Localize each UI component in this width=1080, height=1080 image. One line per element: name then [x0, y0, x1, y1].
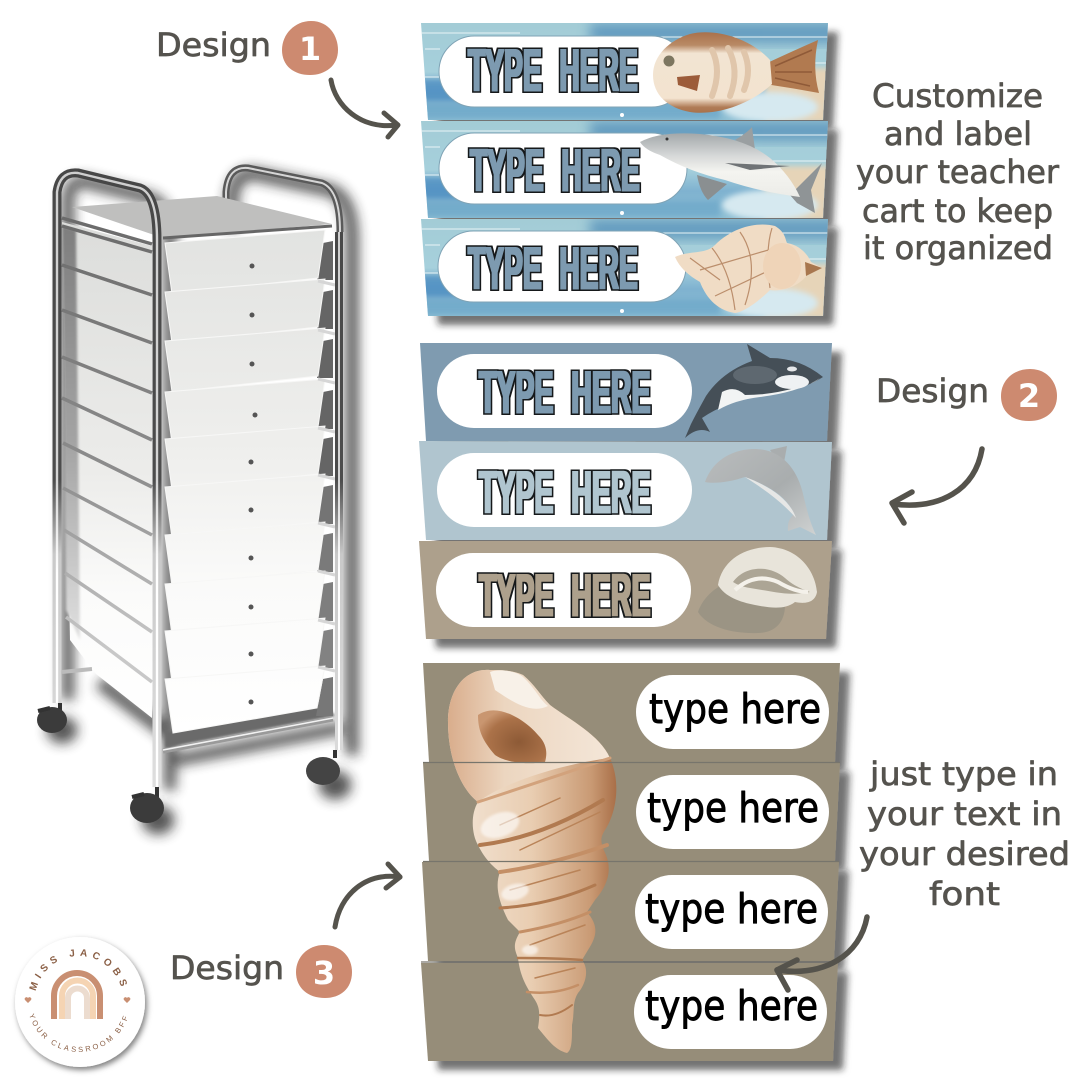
label: conch	[410, 219, 850, 319]
text block: type note: just type in	[869, 755, 1058, 793]
panel: design 3 shell labels	[421, 663, 840, 1061]
cart shadow	[47, 174, 352, 834]
icon: whelk shell	[698, 547, 817, 633]
rainbow	[54, 973, 100, 1019]
label strip 4	[421, 963, 838, 1061]
heading: Design 2: Design	[876, 372, 989, 410]
panel: design 2 solid labels	[419, 343, 832, 639]
logo badge	[13, 936, 151, 1074]
side panel	[62, 222, 152, 718]
text block: customize note: your teacher	[856, 153, 1060, 191]
arrow: Design 3 to labels	[335, 864, 400, 927]
pill: type here 3	[635, 875, 828, 949]
pill: type here 4	[634, 975, 827, 1049]
pill: type here 2	[636, 775, 829, 849]
label: shark: TYPE HERE	[470, 137, 640, 204]
heading: Design 3: Design	[170, 949, 284, 987]
right rail lips	[318, 281, 335, 671]
logo hearts	[25, 997, 130, 1003]
text block: customize note: Customize	[872, 77, 1043, 115]
icon: conch	[675, 224, 822, 313]
seams between strips	[421, 762, 840, 962]
pill: type here 2: type here	[647, 784, 819, 832]
gap under drawers	[165, 703, 335, 748]
heading: Design 2	[876, 369, 1057, 421]
casters	[37, 703, 340, 823]
badge: 2: 2	[1018, 377, 1040, 415]
badge: 1	[282, 21, 338, 75]
label: shark	[410, 121, 850, 221]
posts and front handle	[57, 173, 339, 787]
badge: 1: 1	[299, 30, 321, 68]
text block: type note: your desired	[859, 835, 1070, 873]
icon: fish	[653, 32, 819, 113]
arrow: note to pill	[777, 917, 867, 990]
icon: shark	[640, 127, 822, 213]
badge: 3	[296, 945, 352, 998]
label: orca	[420, 343, 832, 441]
icon: dolphin	[705, 446, 816, 535]
text block: customize note	[856, 77, 1060, 267]
drawer knobs	[248, 264, 258, 704]
pill: type here 4: type here	[645, 982, 818, 1030]
right gaps	[316, 241, 333, 716]
arrow: Design 1 to labels	[331, 80, 398, 137]
label strip 2	[423, 763, 840, 861]
label strip 3	[422, 862, 839, 961]
label: orca: TYPE HERE	[479, 358, 650, 426]
label: dolphin	[419, 441, 832, 540]
label: conch: TYPE HERE	[468, 235, 638, 302]
side rails	[62, 218, 152, 682]
label: fish: TYPE HERE	[468, 37, 638, 104]
logo tagline: YOUR CLASSROOM BFF	[30, 1013, 127, 1052]
pill: type here 1: type here	[649, 685, 821, 733]
drawers	[165, 230, 325, 733]
icon: large spiral shell	[448, 670, 616, 1053]
side strip	[62, 226, 80, 640]
text block: type note: your text in	[867, 795, 1062, 833]
text block: type note	[859, 755, 1070, 913]
logo name: MISS JACOBS	[29, 949, 127, 991]
icon: orca	[685, 344, 823, 438]
top tray	[72, 196, 332, 238]
badge: 3: 3	[313, 954, 335, 992]
pill: type here 1	[636, 675, 829, 749]
text block: type note: font	[929, 875, 1000, 913]
label: dolphin: TYPE HERE	[479, 458, 650, 526]
panel: design 1 ocean labels	[410, 23, 850, 319]
back left cross bar	[62, 669, 92, 672]
text block: customize note: it organized	[863, 229, 1053, 267]
back handle	[226, 168, 340, 232]
arrow: Design 2 to labels	[892, 449, 982, 523]
text block: customize note: cart to keep	[862, 192, 1053, 230]
text block: customize note: and label	[884, 115, 1032, 153]
label: fish	[410, 23, 850, 123]
label: whelk shell: TYPE HERE	[479, 561, 650, 629]
label strip 1	[423, 663, 840, 762]
rolling cart	[37, 168, 352, 834]
heading: Design 1: Design	[156, 26, 271, 64]
bottom bar	[163, 719, 333, 751]
label: whelk shell	[419, 541, 832, 639]
heading: Design 3	[170, 945, 352, 998]
badge: 2	[1001, 369, 1057, 421]
heading: Design 1	[156, 21, 338, 75]
pill: type here 3: type here	[645, 885, 818, 933]
